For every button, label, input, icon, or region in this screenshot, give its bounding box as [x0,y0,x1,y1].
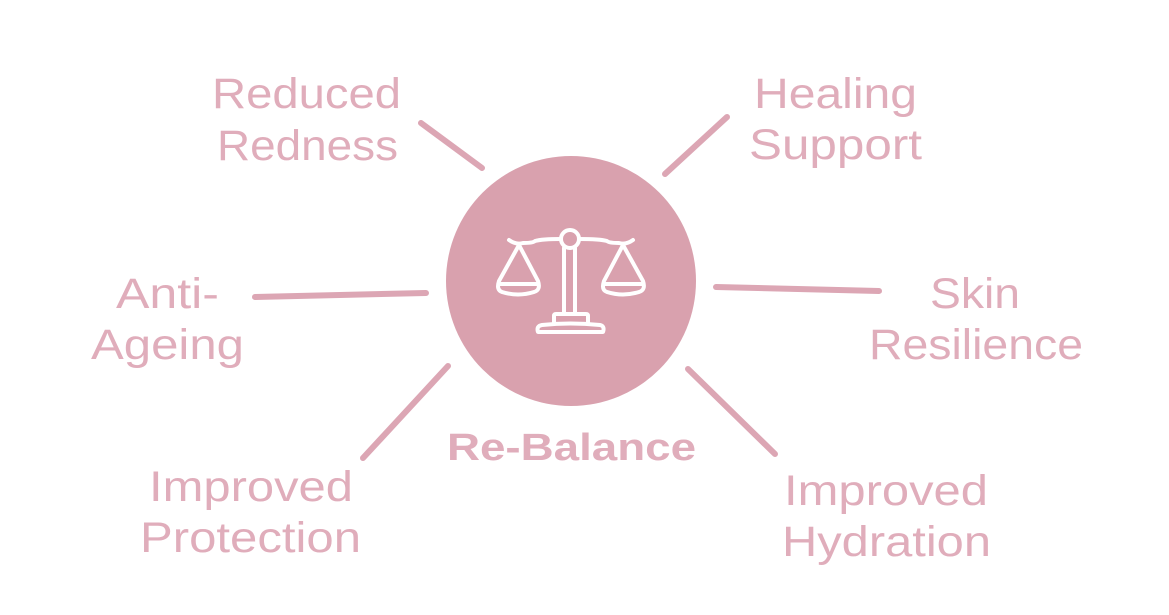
label: Improved Protection: Protection [140,514,361,562]
line: Improved Hydration [688,369,775,454]
label: Improved Hydration: Improved [784,467,988,515]
label: Anti-Ageing: Ageing [91,321,244,369]
connector lines [255,117,879,458]
label: Anti-Ageing: Anti- [116,270,219,318]
line: Improved Protection [363,366,448,458]
label: Healing Support: Healing [754,70,917,118]
label: Reduced Redness: Reduced [212,70,401,118]
label: Skin Resilience [869,270,1083,369]
label: Improved Protection: Improved [149,463,353,511]
label: Reduced Redness: Redness [217,122,398,170]
line: Anti-Ageing [255,293,426,297]
label: Skin Resilience: Resilience [869,321,1083,369]
line: Healing Support [665,117,727,174]
label: Skin Resilience: Skin [930,270,1020,318]
label: Healing Support [749,70,922,169]
line: Reduced Redness [421,123,482,168]
label: Anti-Ageing [91,270,244,369]
label: Reduced Redness [212,70,401,170]
heading: Re-Balance: Re-Balance [447,427,696,469]
central circle [446,156,696,406]
icon: balance scales [498,230,644,332]
label: Improved Hydration: Hydration [782,518,991,566]
label: Improved Protection [140,463,361,562]
label: Healing Support: Support [749,121,922,169]
line: Skin Resilience [716,287,879,291]
label: Improved Hydration [782,467,991,566]
